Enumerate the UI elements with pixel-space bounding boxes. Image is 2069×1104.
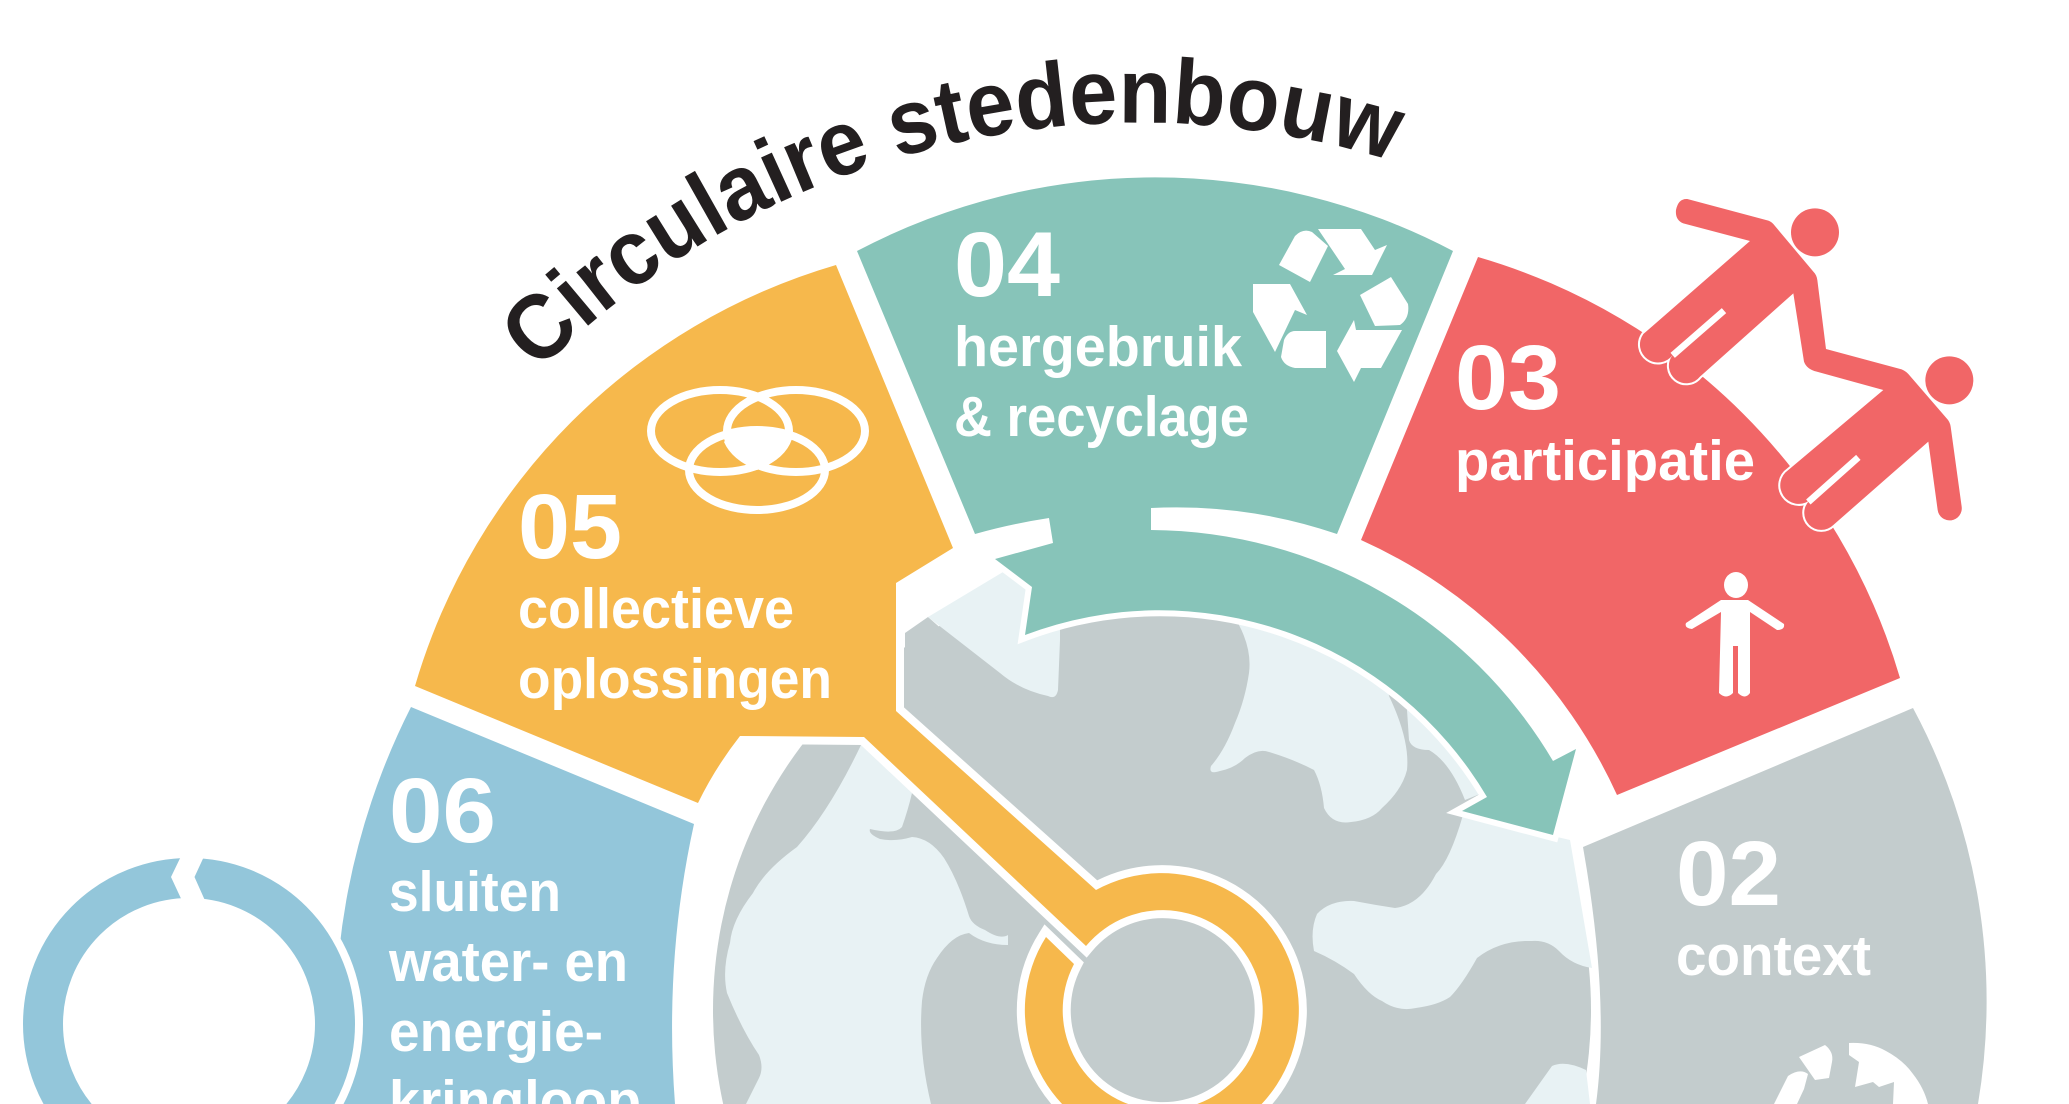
number 05: 05	[518, 476, 622, 578]
label water- en: water- en	[388, 930, 628, 994]
icon: overlapping circles	[651, 390, 865, 510]
icon: climbing figures	[1640, 199, 1973, 530]
label recyclage: & recyclage	[954, 385, 1249, 449]
number 03: 03	[1455, 327, 1561, 429]
label hergebruik: hergebruik	[954, 315, 1242, 379]
label participatie: participatie	[1455, 429, 1755, 493]
label collectieve: collectieve	[518, 577, 794, 641]
icon: closed loop ring	[15, 850, 363, 1104]
label sluiten: sluiten	[389, 860, 561, 924]
icon: recycle	[1253, 229, 1408, 382]
label context: context	[1676, 924, 1871, 988]
panel: 04 hergebruik & recyclage	[857, 177, 1576, 835]
panel: 03 participatie	[1361, 199, 1973, 795]
number 06: 06	[389, 760, 496, 862]
number 04: 04	[954, 214, 1060, 316]
label energie-: energie-	[389, 1000, 603, 1064]
globe	[713, 571, 1592, 1104]
panel: 05 collectieve oplossingen	[415, 265, 1299, 1104]
number 02: 02	[1676, 823, 1781, 925]
panel: 02 context	[1583, 708, 1987, 1104]
icon: standing person	[1686, 572, 1784, 696]
panel: 06 sluiten water- en energie-kringloop	[15, 707, 694, 1104]
icon: globe	[1774, 1043, 1928, 1104]
label oplossingen: oplossingen	[518, 647, 832, 711]
title: Circulaire stedenbouw	[508, 56, 1406, 358]
